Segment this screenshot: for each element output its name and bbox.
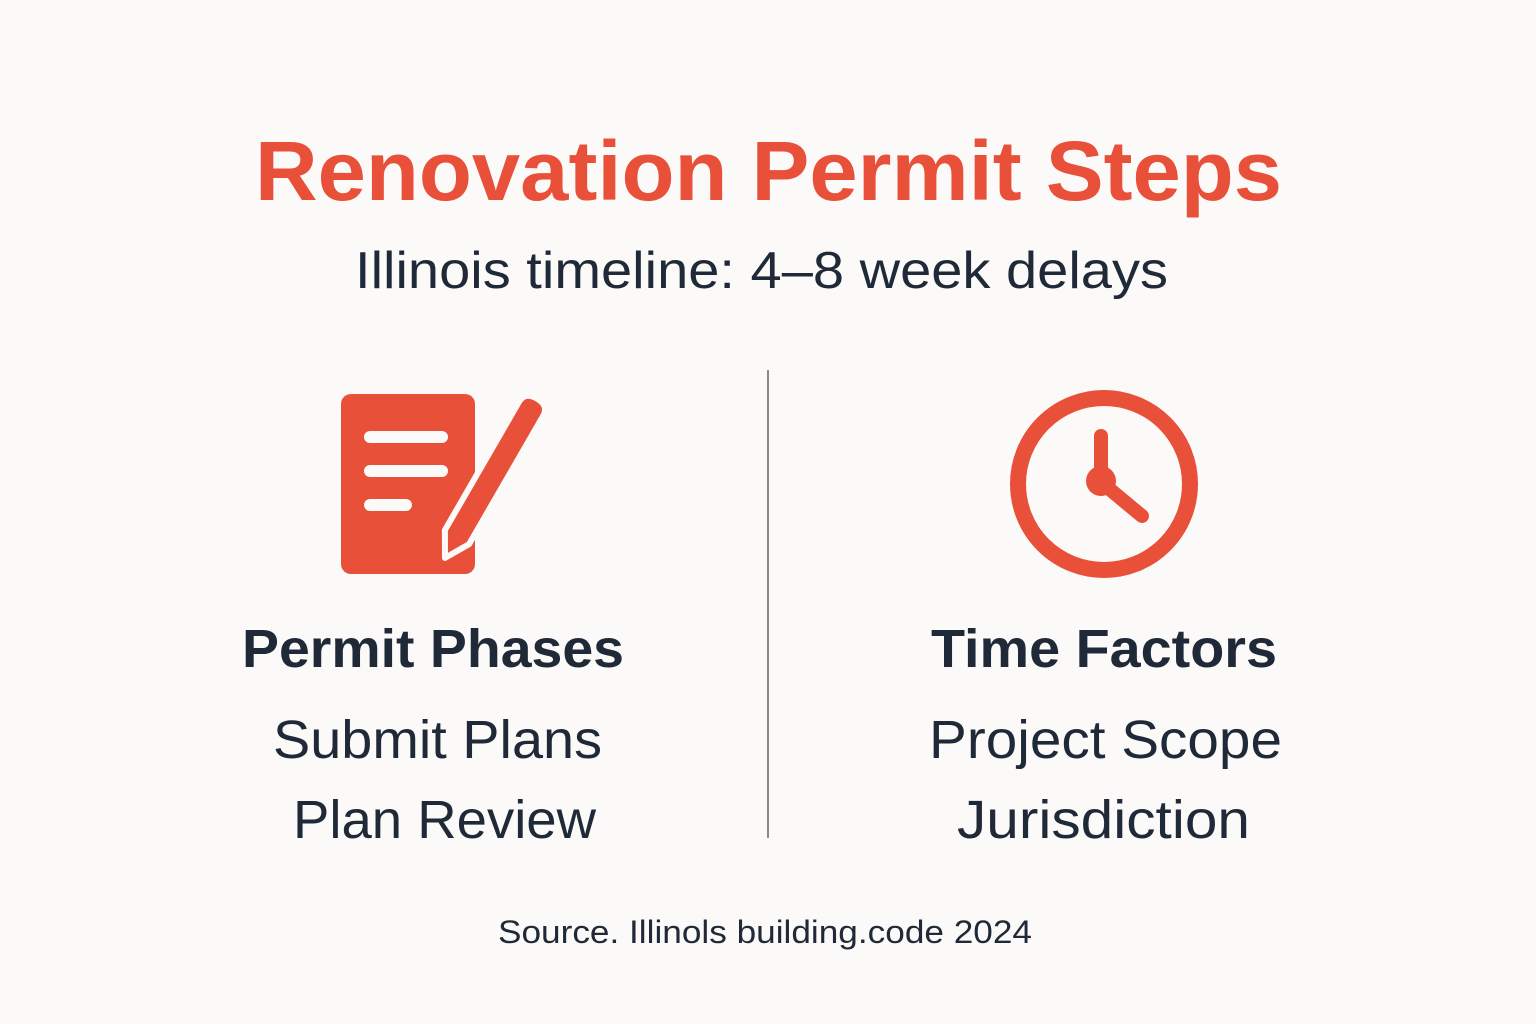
heading: time factors: Time Factors <box>931 619 1277 679</box>
icon: clock <box>1018 398 1190 570</box>
source: Source. Illinols building.code 2024 <box>498 914 1032 950</box>
panel: time factors <box>929 619 1282 850</box>
item: project scope: Project Scope <box>929 710 1282 770</box>
panel: permit phases <box>242 619 624 850</box>
title: Renovation Permit Steps <box>255 124 1282 218</box>
item: submit plans: Submit Plans <box>273 710 602 770</box>
subtitle: Illinois timeline: 4–8 week delays <box>355 242 1168 300</box>
icon: document with pen <box>341 392 549 574</box>
heading: permit phases: Permit Phases <box>242 619 624 679</box>
item: jurisdiction: Jurisdiction <box>957 790 1250 850</box>
item: plan review: Plan Review <box>293 790 597 850</box>
